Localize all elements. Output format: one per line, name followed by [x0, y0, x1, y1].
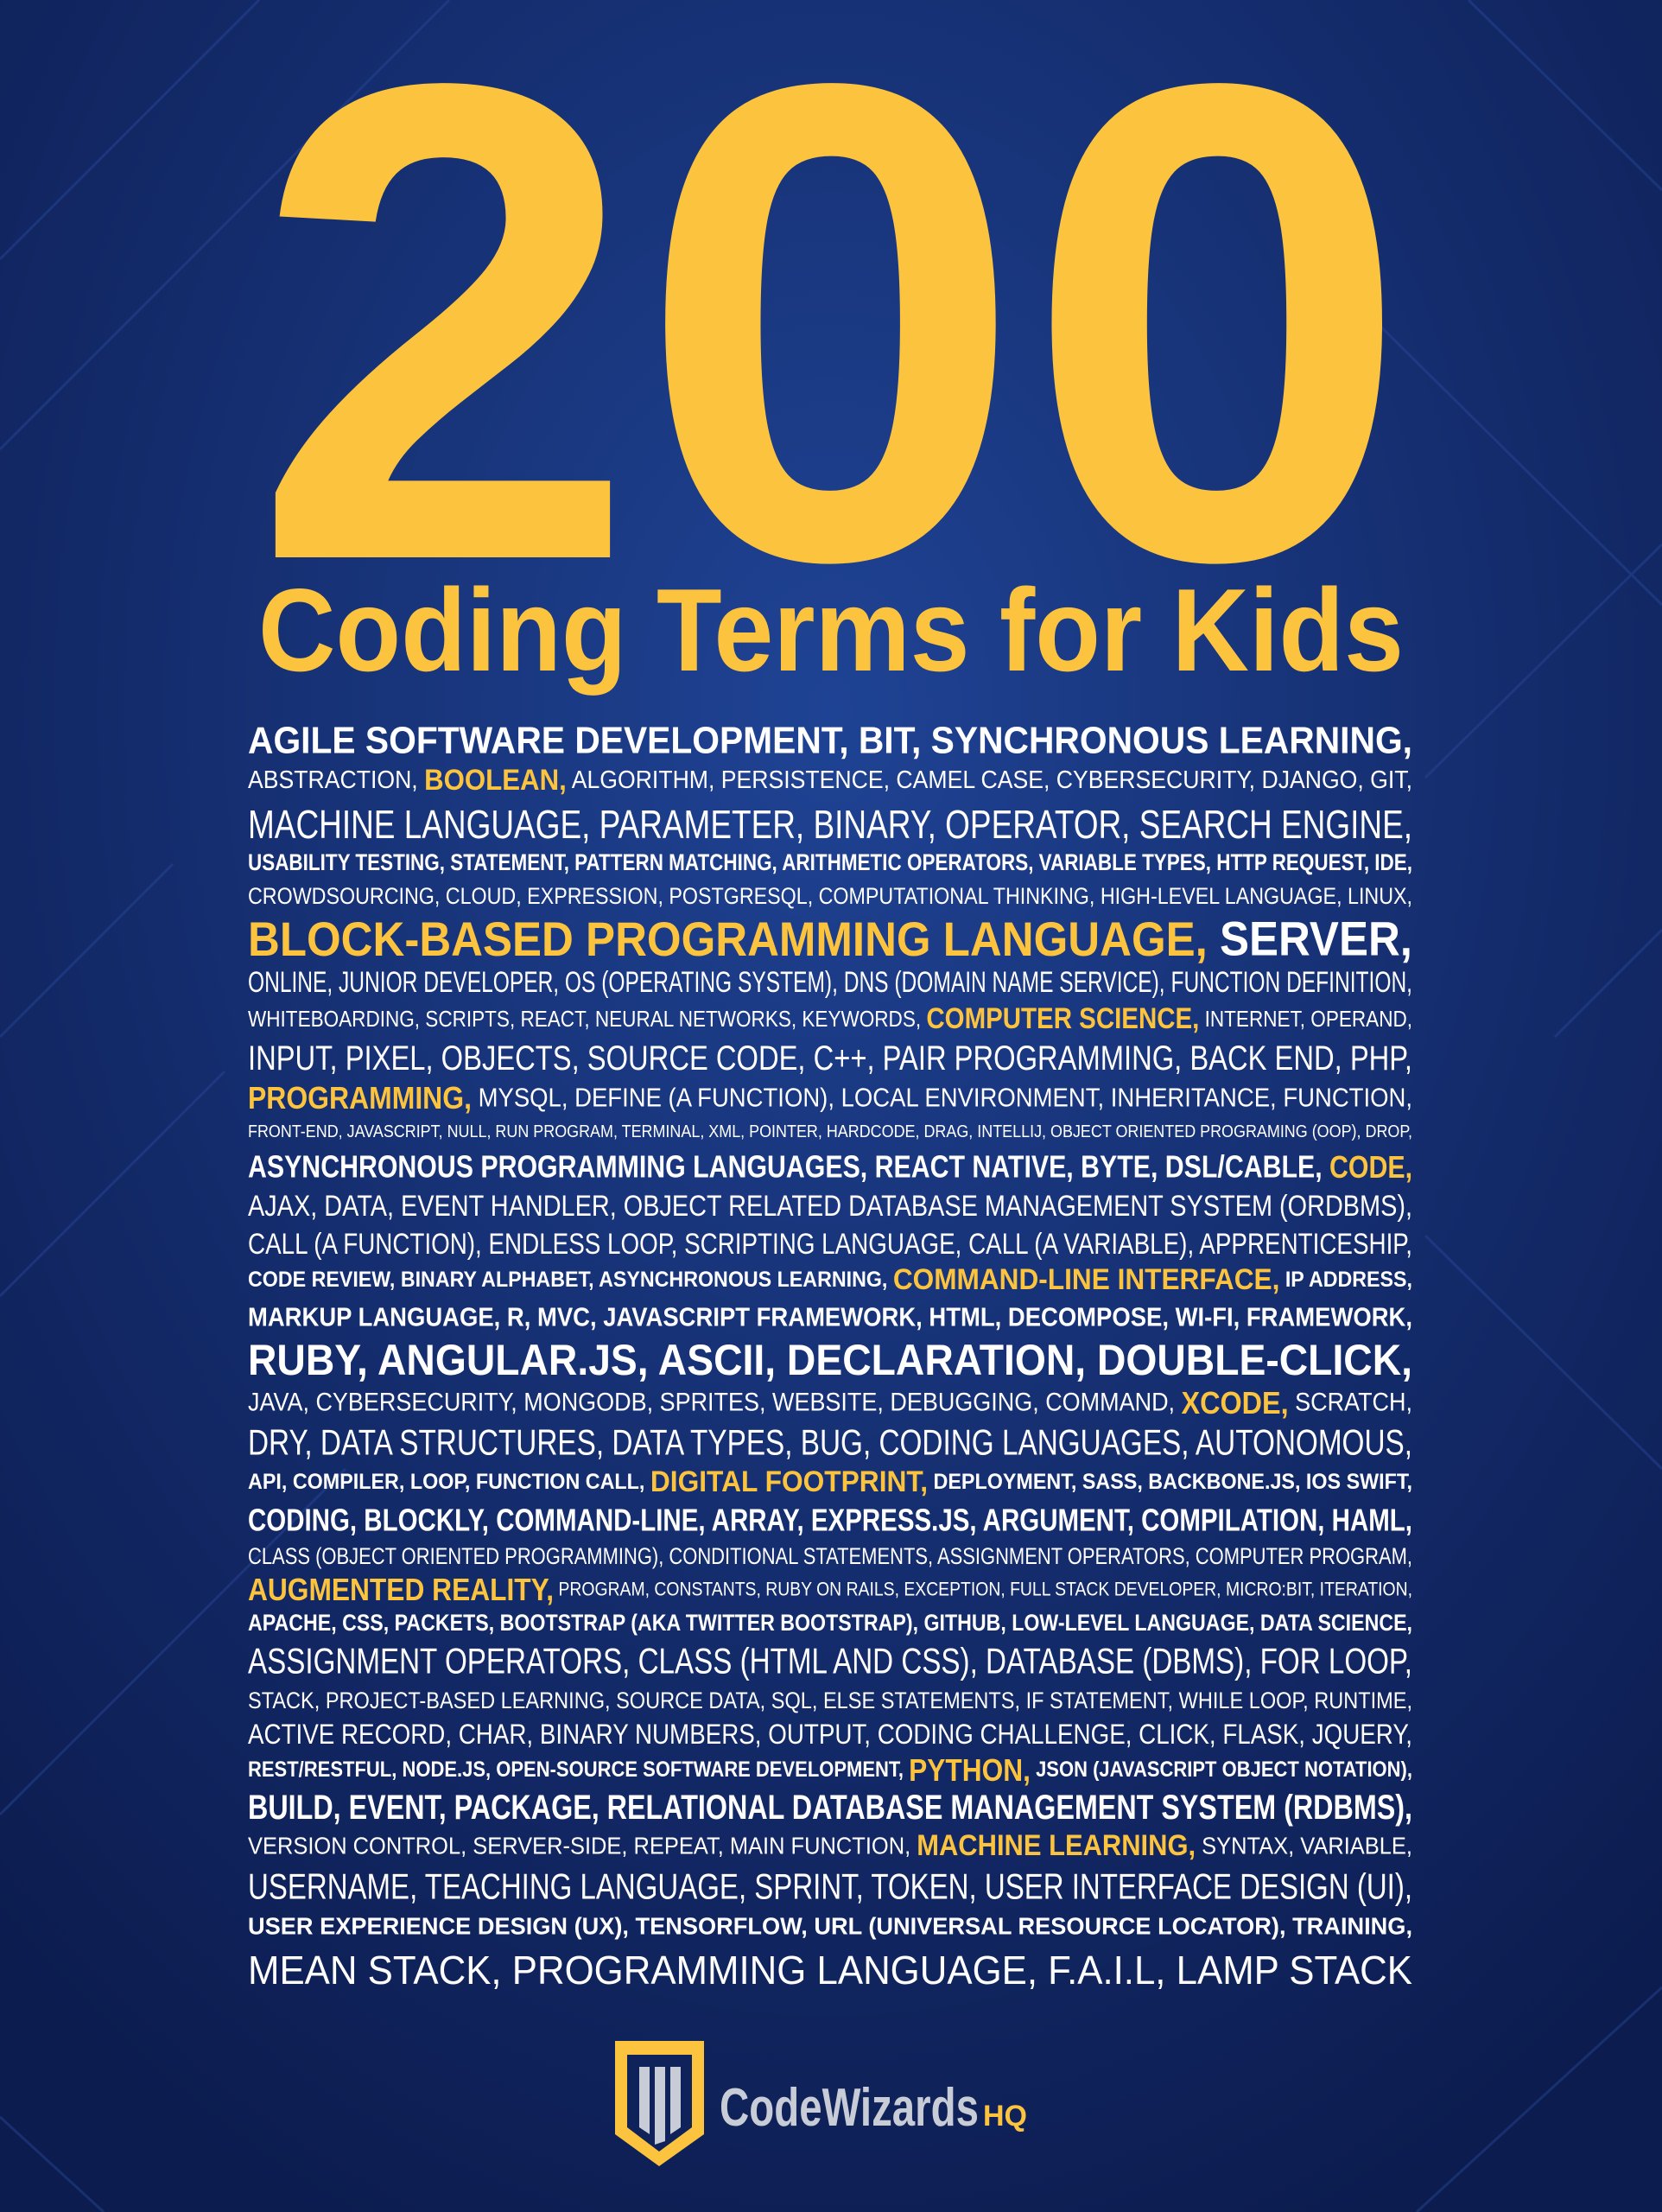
word list: ASYNCHRONOUS PROGRAMMING LANGUAGES, REACT NATIVE, BYTE, DSL/CABLE, CODE, [248, 1149, 1412, 1184]
word list: MEAN STACK, PROGRAMMING LANGUAGE, F.A.I.L, LAMP STACK [248, 1948, 1412, 1993]
word list: AJAX, DATA, EVENT HANDLER, OBJECT RELATED DATABASE MANAGEMENT SYSTEM (ORDBMS), [248, 1190, 1412, 1223]
word list [248, 719, 1412, 1993]
word list: ACTIVE RECORD, CHAR, BINARY NUMBERS, OUTPUT, CODING CHALLENGE, CLICK, FLASK, JQUERY, [248, 1719, 1412, 1750]
logo [615, 2041, 1027, 2166]
word list: API, COMPILER, LOOP, FUNCTION CALL, DIGITAL FOOTPRINT, DEPLOYMENT, SASS, BACKBONE.JS, IOS SWIFT, [248, 1465, 1412, 1498]
word list: MACHINE LANGUAGE, PARAMETER, BINARY, OPERATOR, SEARCH ENGINE, [248, 802, 1412, 847]
logo: HQ [983, 2100, 1027, 2133]
word list: CROWDSOURCING, CLOUD, EXPRESSION, POSTGRESQL, COMPUTATIONAL THINKING, HIGH-LEVEL LANGUAGE, LINUX, [248, 883, 1412, 909]
word list: CALL (A FUNCTION), ENDLESS LOOP, SCRIPTING LANGUAGE, CALL (A VARIABLE), APPRENTICESHIP, [248, 1228, 1412, 1261]
icon: shield [615, 2041, 704, 2166]
word list: CLASS (OBJECT ORIENTED PROGRAMMING), CONDITIONAL STATEMENTS, ASSIGNMENT OPERATORS, COMPUTER PROGRAM, [248, 1543, 1412, 1569]
word list: USER EXPERIENCE DESIGN (UX), TENSORFLOW, URL (UNIVERSAL RESOURCE LOCATOR), TRAINING, [248, 1913, 1412, 1939]
word list: USABILITY TESTING, STATEMENT, PATTERN MATCHING, ARITHMETIC OPERATORS, VARIABLE TYPES, HTTP REQUEST, IDE, [248, 849, 1412, 875]
word list: REST/RESTFUL, NODE.JS, OPEN-SOURCE SOFTWARE DEVELOPMENT, PYTHON, JSON (JAVASCRIPT OBJECT NOTATION), [248, 1752, 1412, 1787]
word list: FRONT-END, JAVASCRIPT, NULL, RUN PROGRAM, TERMINAL, XML, POINTER, HARDCODE, DRAG, INTELLIJ, OBJECT ORIENTED PROGRAMING (OOP), DROP, [248, 1122, 1412, 1141]
word list: WHITEBOARDING, SCRIPTS, REACT, NEURAL NETWORKS, KEYWORDS, COMPUTER SCIENCE, INTERNET, OPERAND, [248, 1002, 1412, 1035]
word list: JAVA, CYBERSECURITY, MONGODB, SPRITES, WEBSITE, DEBUGGING, COMMAND, XCODE, SCRATCH, [248, 1384, 1412, 1421]
word list: PROGRAMMING, MYSQL, DEFINE (A FUNCTION), LOCAL ENVIRONMENT, INHERITANCE, FUNCTION, [248, 1080, 1412, 1115]
word list: BLOCK-BASED PROGRAMMING LANGUAGE, SERVER, [248, 911, 1412, 966]
word list: CODING, BLOCKLY, COMMAND-LINE, ARRAY, EXPRESS.JS, ARGUMENT, COMPILATION, HAML, [248, 1502, 1412, 1538]
word list: MARKUP LANGUAGE, R, MVC, JAVASCRIPT FRAMEWORK, HTML, DECOMPOSE, WI-FI, FRAMEWORK, [248, 1301, 1412, 1332]
word list: ABSTRACTION, BOOLEAN, ALGORITHM, PERSISTENCE, CAMEL CASE, CYBERSECURITY, DJANGO, GIT, [248, 764, 1412, 797]
word list: RUBY, ANGULAR.JS, ASCII, DECLARATION, DOUBLE-CLICK, [248, 1336, 1412, 1384]
word list: VERSION CONTROL, SERVER-SIDE, REPEAT, MAIN FUNCTION, MACHINE LEARNING, SYNTAX, VARIABLE, [248, 1829, 1412, 1862]
word list: STACK, PROJECT-BASED LEARNING, SOURCE DATA, SQL, ELSE STATEMENTS, IF STATEMENT, WHILE LOOP, RUNTIME, [248, 1688, 1412, 1713]
subtitle: Coding Terms for Kids [258, 564, 1404, 696]
word list: AUGMENTED REALITY, PROGRAM, CONSTANTS, RUBY ON RAILS, EXCEPTION, FULL STACK DEVELOPER, MICRO:BIT, ITERATION, [248, 1571, 1412, 1607]
logo text: CodeWizards [720, 2078, 979, 2138]
word list: AGILE SOFTWARE DEVELOPMENT, BIT, SYNCHRONOUS LEARNING, [248, 719, 1412, 762]
word list: APACHE, CSS, PACKETS, BOOTSTRAP (AKA TWITTER BOOTSTRAP), GITHUB, LOW-LEVEL LANGUAGE, DATA SCIENCE, [248, 1610, 1412, 1636]
word list: INPUT, PIXEL, OBJECTS, SOURCE CODE, C++, PAIR PROGRAMMING, BACK END, PHP, [248, 1039, 1412, 1077]
word list: CODE REVIEW, BINARY ALPHABET, ASYNCHRONOUS LEARNING, COMMAND-LINE INTERFACE, IP ADDRESS, [248, 1263, 1412, 1296]
word list: BUILD, EVENT, PACKAGE, RELATIONAL DATABASE MANAGEMENT SYSTEM (RDBMS), [248, 1789, 1412, 1827]
